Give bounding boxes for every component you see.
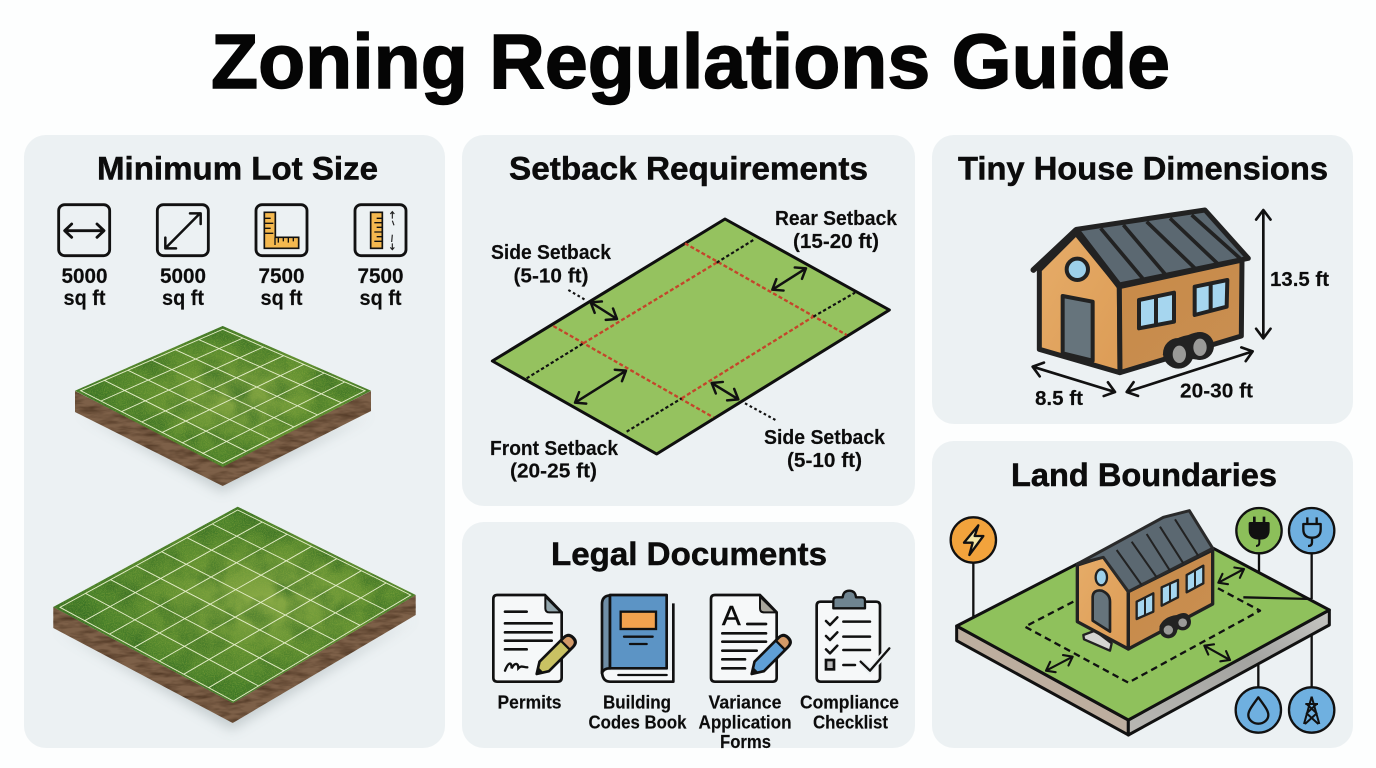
- label: variance application forms: Forms: [720, 732, 771, 752]
- label: 7500 sq ft: sq ft: [360, 287, 402, 310]
- label: 5000 sq ft: [62, 265, 108, 310]
- title: Zoning Regulations Guide: [211, 19, 1170, 105]
- icon: L-shaped ruler: [256, 205, 307, 256]
- grass plot: 7500 sq ft: [53, 507, 416, 730]
- house on lot: [1077, 511, 1213, 651]
- panel: land boundaries: [932, 441, 1353, 748]
- label: compliance checklist: [800, 692, 899, 732]
- label: compliance checklist: Checklist: [813, 712, 888, 732]
- icon: power plug blue: [1289, 508, 1334, 553]
- heading: minimum lot size: Minimum Lot Size: [97, 150, 378, 186]
- heading: setback requirements: Setback Requirements: [509, 150, 868, 186]
- icon: diagonal arrow: [157, 205, 208, 256]
- label: rear setback: [775, 208, 898, 253]
- label: 5000 sq ft: [160, 265, 206, 310]
- label: building codes book: Codes Book: [588, 712, 687, 732]
- label: 8.5 ft: 8.5 ft: [1035, 388, 1083, 410]
- panel: minimum lot size: [24, 135, 445, 748]
- panel: legal documents: [462, 522, 915, 752]
- label: 7500 sq ft: 7500: [258, 265, 304, 288]
- arrow: length: [1127, 351, 1253, 392]
- label: 5000 sq ft: 5000: [160, 265, 206, 288]
- label: 5000 sq ft: sq ft: [162, 287, 204, 310]
- utility lines: [973, 553, 1312, 687]
- icon row: lot sizes: [59, 205, 406, 256]
- heading: land boundaries: Land Boundaries: [1011, 457, 1277, 493]
- label: compliance checklist: Compliance: [800, 692, 899, 712]
- label: permits: Permits: [498, 692, 562, 712]
- label: rear setback: (15-20 ft): [793, 231, 879, 253]
- setback lot diagram: [492, 219, 889, 454]
- label: 7500 sq ft: sq ft: [260, 287, 303, 310]
- icon: vertical ruler: [355, 205, 406, 256]
- icon: power plug green: [1236, 508, 1282, 553]
- label: 20-30 ft: 20-30 ft: [1180, 380, 1253, 402]
- label: variance application forms: Variance: [708, 692, 782, 712]
- heading: legal documents: Legal Documents: [551, 536, 827, 572]
- panel: tiny house dimensions: [932, 135, 1353, 424]
- arrow: side setback: [591, 302, 617, 319]
- icon: width arrow: [59, 205, 110, 256]
- arrow: front setback: [575, 371, 626, 403]
- label: side setback top: (5-10 ft): [514, 266, 588, 288]
- label: 5000 sq ft: 5000: [62, 265, 108, 288]
- label: variance application forms: Application: [698, 712, 792, 732]
- label: side setback top: [491, 242, 612, 288]
- label: side setback top: Side Setback: [491, 242, 612, 264]
- label: front setback: [490, 438, 619, 482]
- arrow: width: [1033, 367, 1115, 392]
- icon: variance application form: [711, 595, 793, 682]
- label: 7500 sq ft: 7500: [358, 265, 404, 288]
- icon: transmission tower: [1289, 687, 1334, 733]
- heading: tiny house dimensions: Tiny House Dimensions: [958, 150, 1328, 186]
- label: building codes book: Building: [603, 692, 671, 712]
- label: building codes book: [588, 692, 687, 732]
- label: 13.5 ft: 13.5 ft: [1270, 269, 1329, 291]
- label: 5000 sq ft: sq ft: [64, 287, 106, 310]
- arrow: height: [1259, 210, 1267, 338]
- arrow: rear setback: [772, 268, 806, 290]
- label: 7500 sq ft: [258, 265, 304, 310]
- icon: compliance checklist: [817, 591, 889, 682]
- label: side setback bottom: (5-10 ft): [787, 450, 862, 472]
- label: front setback: Front Setback: [490, 438, 619, 460]
- label: rear setback: Rear Setback: [775, 208, 898, 230]
- grass plot: 5000 sq ft: [75, 326, 372, 492]
- icon: building codes book: [602, 595, 673, 682]
- icon: variance application form: A: [722, 600, 741, 631]
- icon: permit document: [493, 595, 578, 682]
- panel: setback requirements: [462, 135, 915, 506]
- label: 7500 sq ft: [358, 265, 404, 310]
- label: side setback bottom: [764, 427, 886, 472]
- land parcel: [957, 533, 1329, 735]
- label: side setback bottom: Side Setback: [764, 427, 886, 449]
- arrow: side setback: [712, 383, 738, 399]
- label: variance application forms: [698, 692, 792, 752]
- label: front setback: (20-25 ft): [510, 460, 597, 482]
- icon: water drop: [1236, 687, 1281, 733]
- tiny house illustration: [1033, 210, 1263, 392]
- trailer wheels: [1163, 332, 1214, 369]
- icon: electricity: [951, 517, 996, 563]
